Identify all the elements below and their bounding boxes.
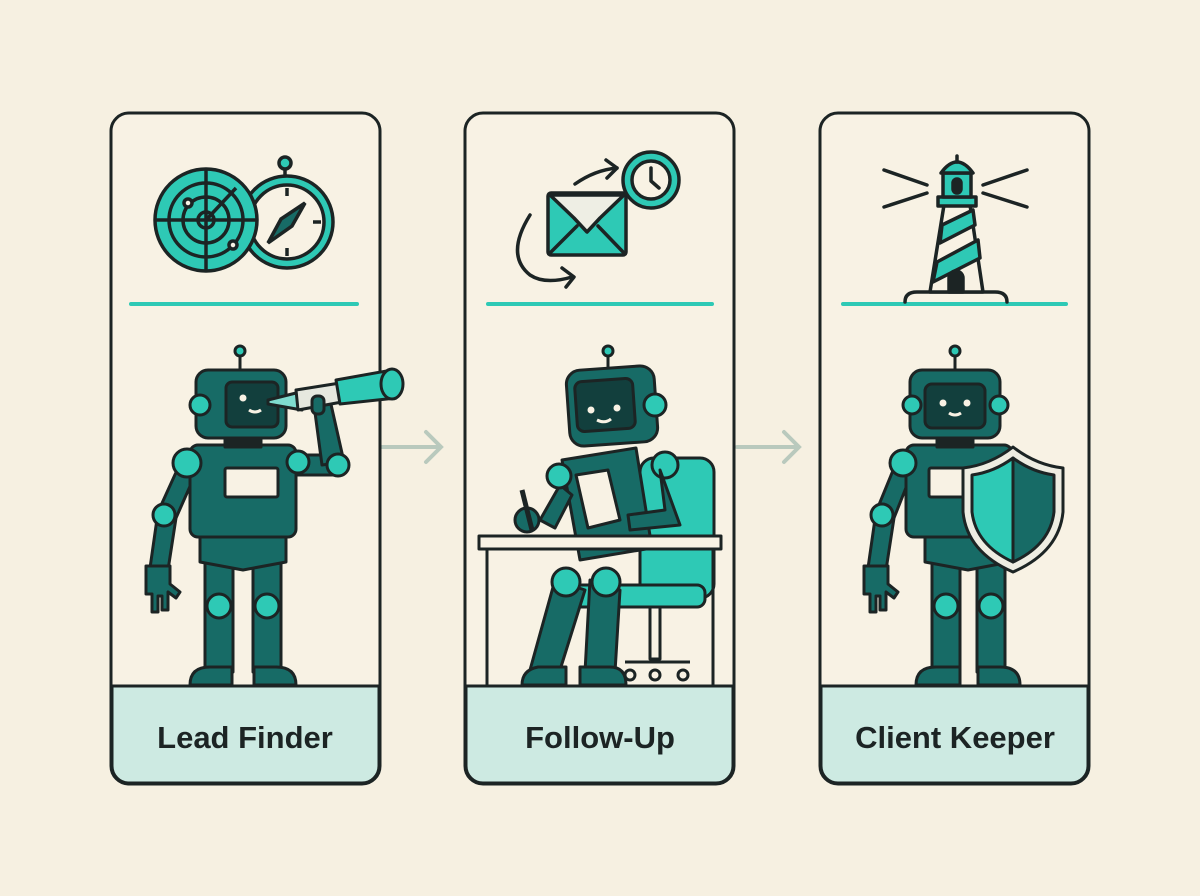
arrow: panel 2 to 3 [737, 432, 799, 462]
panel: follow-up [465, 113, 734, 784]
heading: Client Keeper: Client Keeper [855, 720, 1055, 755]
panel: client keeper [820, 113, 1089, 784]
label band [112, 686, 379, 783]
heading: Lead Finder: Lead Finder [157, 720, 333, 755]
heading: Follow-Up: Follow-Up [525, 720, 675, 755]
panel: lead finder [111, 113, 403, 784]
icon: lighthouse [884, 156, 1027, 302]
icon: envelope and clock [518, 152, 679, 287]
label band [821, 686, 1088, 783]
label band [466, 686, 733, 783]
robot at desk [479, 346, 721, 685]
robot with telescope [146, 346, 403, 685]
arrow: panel 1 to 2 [382, 432, 441, 462]
icon: radar and compass [155, 157, 333, 271]
robot with shield [864, 346, 1063, 685]
